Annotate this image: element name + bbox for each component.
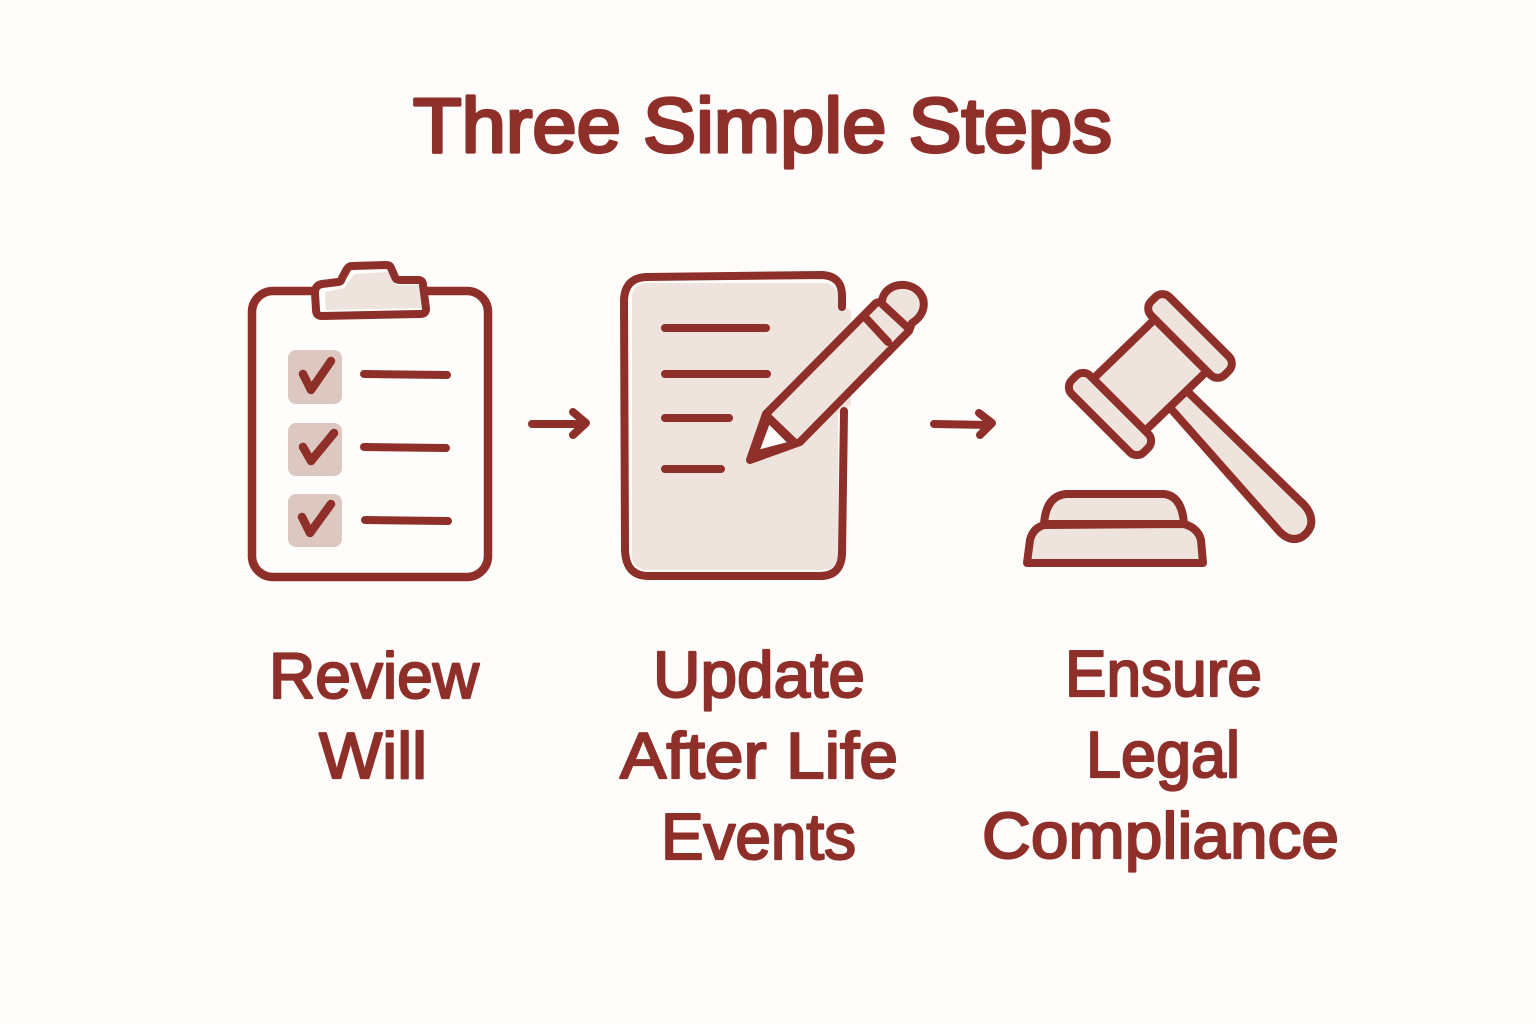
gavel handle <box>1172 392 1311 539</box>
icon: gavel <box>1027 290 1311 563</box>
checklist item 3 <box>288 494 448 547</box>
label: step 1 <box>269 639 480 792</box>
gavel top cap <box>1144 290 1236 382</box>
label: step 1: Will <box>319 719 427 792</box>
document text lines <box>665 328 767 469</box>
sound block <box>1027 494 1203 563</box>
arrow: step 2 to step 3 <box>934 413 992 435</box>
checklist item 2 <box>288 423 446 476</box>
label: step 3: Ensure <box>1065 637 1262 710</box>
checklist item 1 <box>288 350 447 404</box>
label: step 3 <box>982 637 1339 872</box>
gavel head <box>1093 319 1207 431</box>
icon: document with pencil <box>624 275 924 576</box>
title: Three Simple Steps <box>413 83 1112 169</box>
icon: clipboard with checklist <box>252 265 488 577</box>
label: step 1: Review <box>269 639 480 712</box>
arrow: step 1 to step 2 <box>532 412 586 435</box>
gavel bottom cap <box>1065 369 1155 459</box>
label: step 2 <box>620 638 898 873</box>
label: step 3: Legal <box>1086 718 1240 791</box>
label: step 2: Update <box>653 638 865 711</box>
label: step 2: Events <box>661 800 856 873</box>
label: step 3: Compliance <box>982 799 1339 872</box>
label: step 2: After Life <box>620 719 898 792</box>
pencil <box>750 285 924 460</box>
